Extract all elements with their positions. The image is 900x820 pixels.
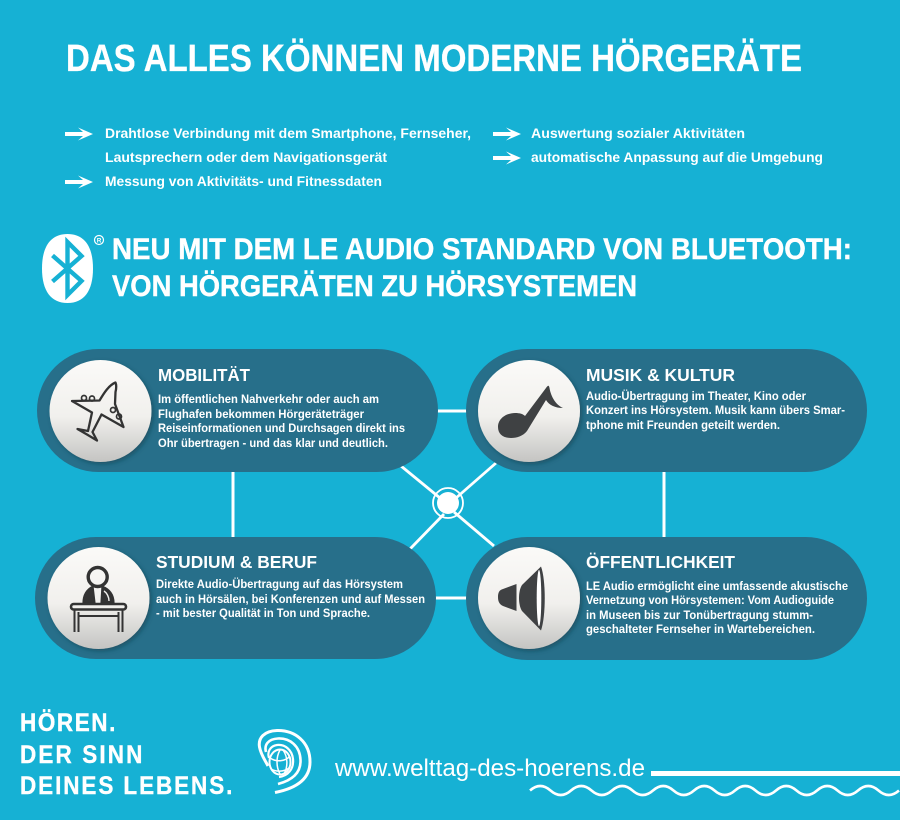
text: Musik und Kultur <box>586 389 845 432</box>
arrow: third feature <box>493 128 521 140</box>
panel: Öffentlichkeit <box>466 537 867 660</box>
feature: wireless connection <box>105 125 471 165</box>
text: Mobilität <box>158 392 405 450</box>
slogan: HÖREN. <box>20 709 115 737</box>
panel: Studium und Beruf <box>35 537 436 659</box>
heading: Studium und Beruf: STUDIUM & BERUF <box>156 552 317 572</box>
feature: automatic adjustment: automatische Anpassung auf die Umgebung <box>531 149 823 165</box>
text: Musik und Kultur: tphone mit Freunden geteilt werden. <box>586 418 780 432</box>
text: Mobilität: Reiseinformationen und Durchsagen direkt ins <box>158 421 405 435</box>
icon: ear and globe logo <box>259 730 310 792</box>
website url: www.welttag-des-hoerens.de <box>334 755 645 782</box>
heading: Mobilität: MOBILITÄT <box>158 365 250 385</box>
icon: bluetooth logo: R <box>97 238 102 244</box>
feature list <box>65 125 823 189</box>
text: Öffentlichkeit: Vernetzung von Hörsystemen: Vom Audioguide <box>586 593 834 607</box>
feature: wireless connection: Lautsprechern oder dem Navigationsgerät <box>105 149 387 165</box>
slogan: DER SINN <box>20 741 142 769</box>
panel: Mobilität <box>37 349 438 472</box>
heading: Öffentlichkeit: ÖFFENTLICHKEIT <box>586 552 735 572</box>
text: Öffentlichkeit: LE Audio ermöglicht eine umfassende akustische <box>586 579 848 593</box>
text: Studium und Beruf <box>156 577 425 620</box>
arrow: first feature <box>65 128 93 140</box>
icon: bluetooth logo <box>42 234 104 303</box>
arrow: fourth feature <box>493 152 521 164</box>
feature: fitness data: Messung von Aktivitäts- und Fitnessdaten <box>105 173 382 189</box>
title: DAS ALLES KÖNNEN MODERNE HÖRGERÄTE <box>66 37 802 80</box>
slogan: DEINES LEBENS. <box>20 772 232 800</box>
text: Öffentlichkeit: in Museen bis zur Tonübertragung stumm- <box>586 608 813 622</box>
text: Öffentlichkeit <box>586 579 848 636</box>
subheading: VON HÖRGERÄTEN ZU HÖRSYSTEMEN <box>112 270 637 303</box>
arrow: second feature <box>65 176 93 188</box>
slogan <box>20 709 232 800</box>
subheading <box>112 233 852 303</box>
text: Studium und Beruf: auch in Hörsälen, bei Konferenzen und auf Messen <box>156 592 425 606</box>
icon: music note <box>478 360 580 462</box>
decorative bar and wave <box>530 771 900 795</box>
text: Mobilität: Im öffentlichen Nahverkehr oder auch am <box>158 392 379 406</box>
feature: wireless connection: Drahtlose Verbindung mit dem Smartphone, Fernseher, <box>105 125 471 141</box>
text: Mobilität: Flughafen bekommen Hörgeräteträger <box>158 407 364 421</box>
subheading: NEU MIT DEM LE AUDIO STANDARD VON BLUETOOTH: <box>112 233 852 266</box>
panel: Musik und Kultur <box>466 349 867 472</box>
text: Musik und Kultur: Audio-Übertragung im Theater, Kino oder <box>586 389 806 403</box>
network connectors <box>233 411 664 598</box>
icon: loudspeaker <box>478 547 580 649</box>
text: Studium und Beruf: Direkte Audio-Übertragung auf das Hörsystem <box>156 577 403 591</box>
heading: Musik und Kultur: MUSIK & KULTUR <box>586 365 735 385</box>
feature: social activity: Auswertung sozialer Aktivitäten <box>531 125 745 141</box>
icon: airplane <box>50 360 152 462</box>
icon: person at desk <box>48 547 150 649</box>
text: Musik und Kultur: Konzert ins Hörsystem. Musik kann übers Smar- <box>586 403 845 417</box>
text: Mobilität: Ohr übertragen - und das klar und deutlich. <box>158 436 388 450</box>
text: Öffentlichkeit: geschalteter Fernseher in Wartebereichen. <box>586 622 815 636</box>
text: Studium und Beruf: - mit bester Qualität in Ton und Sprache. <box>156 606 370 620</box>
